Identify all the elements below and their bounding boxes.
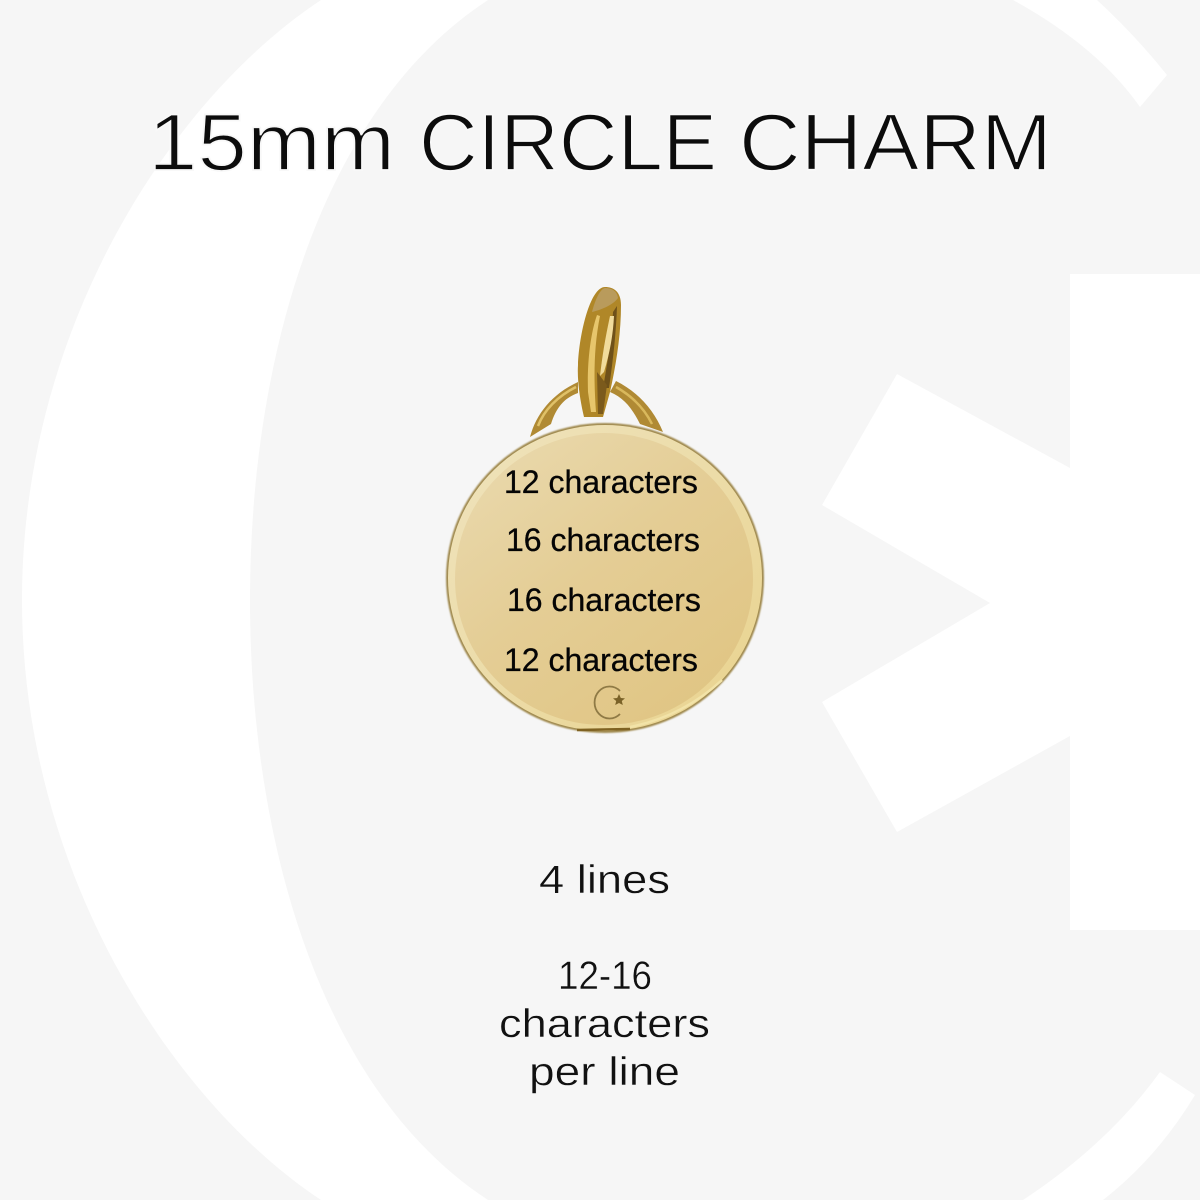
title: 15mm: [148, 98, 395, 188]
engraved text lines: 12 characters: [504, 642, 698, 678]
specification text: [499, 858, 710, 1094]
disc: [446, 423, 764, 733]
icon: crescent and star maker mark: [595, 686, 625, 718]
connector loop on the disc: [530, 381, 663, 437]
jump ring: [578, 287, 621, 417]
title: CHARM: [739, 98, 1052, 188]
per line label: per line: [529, 1050, 680, 1094]
watermark: crescent bottom-right tip: [1023, 1072, 1195, 1200]
engraved text lines: 16 characters: [507, 582, 701, 618]
characters label: characters: [499, 1002, 710, 1046]
character range: 12-16: [558, 954, 652, 998]
watermark: crescent top-right tip: [1013, 0, 1167, 107]
title: [148, 98, 1052, 188]
line count: 4 lines: [539, 858, 670, 902]
title: CIRCLE: [419, 98, 717, 188]
engraved text lines: 16 characters: [506, 522, 700, 558]
charm pendant: [446, 287, 764, 733]
watermark: star: [822, 274, 1200, 930]
engraved text lines: 12 characters: [504, 464, 698, 500]
watermark: crescent left arc: [22, 0, 488, 1200]
engraved text lines: [504, 464, 701, 678]
